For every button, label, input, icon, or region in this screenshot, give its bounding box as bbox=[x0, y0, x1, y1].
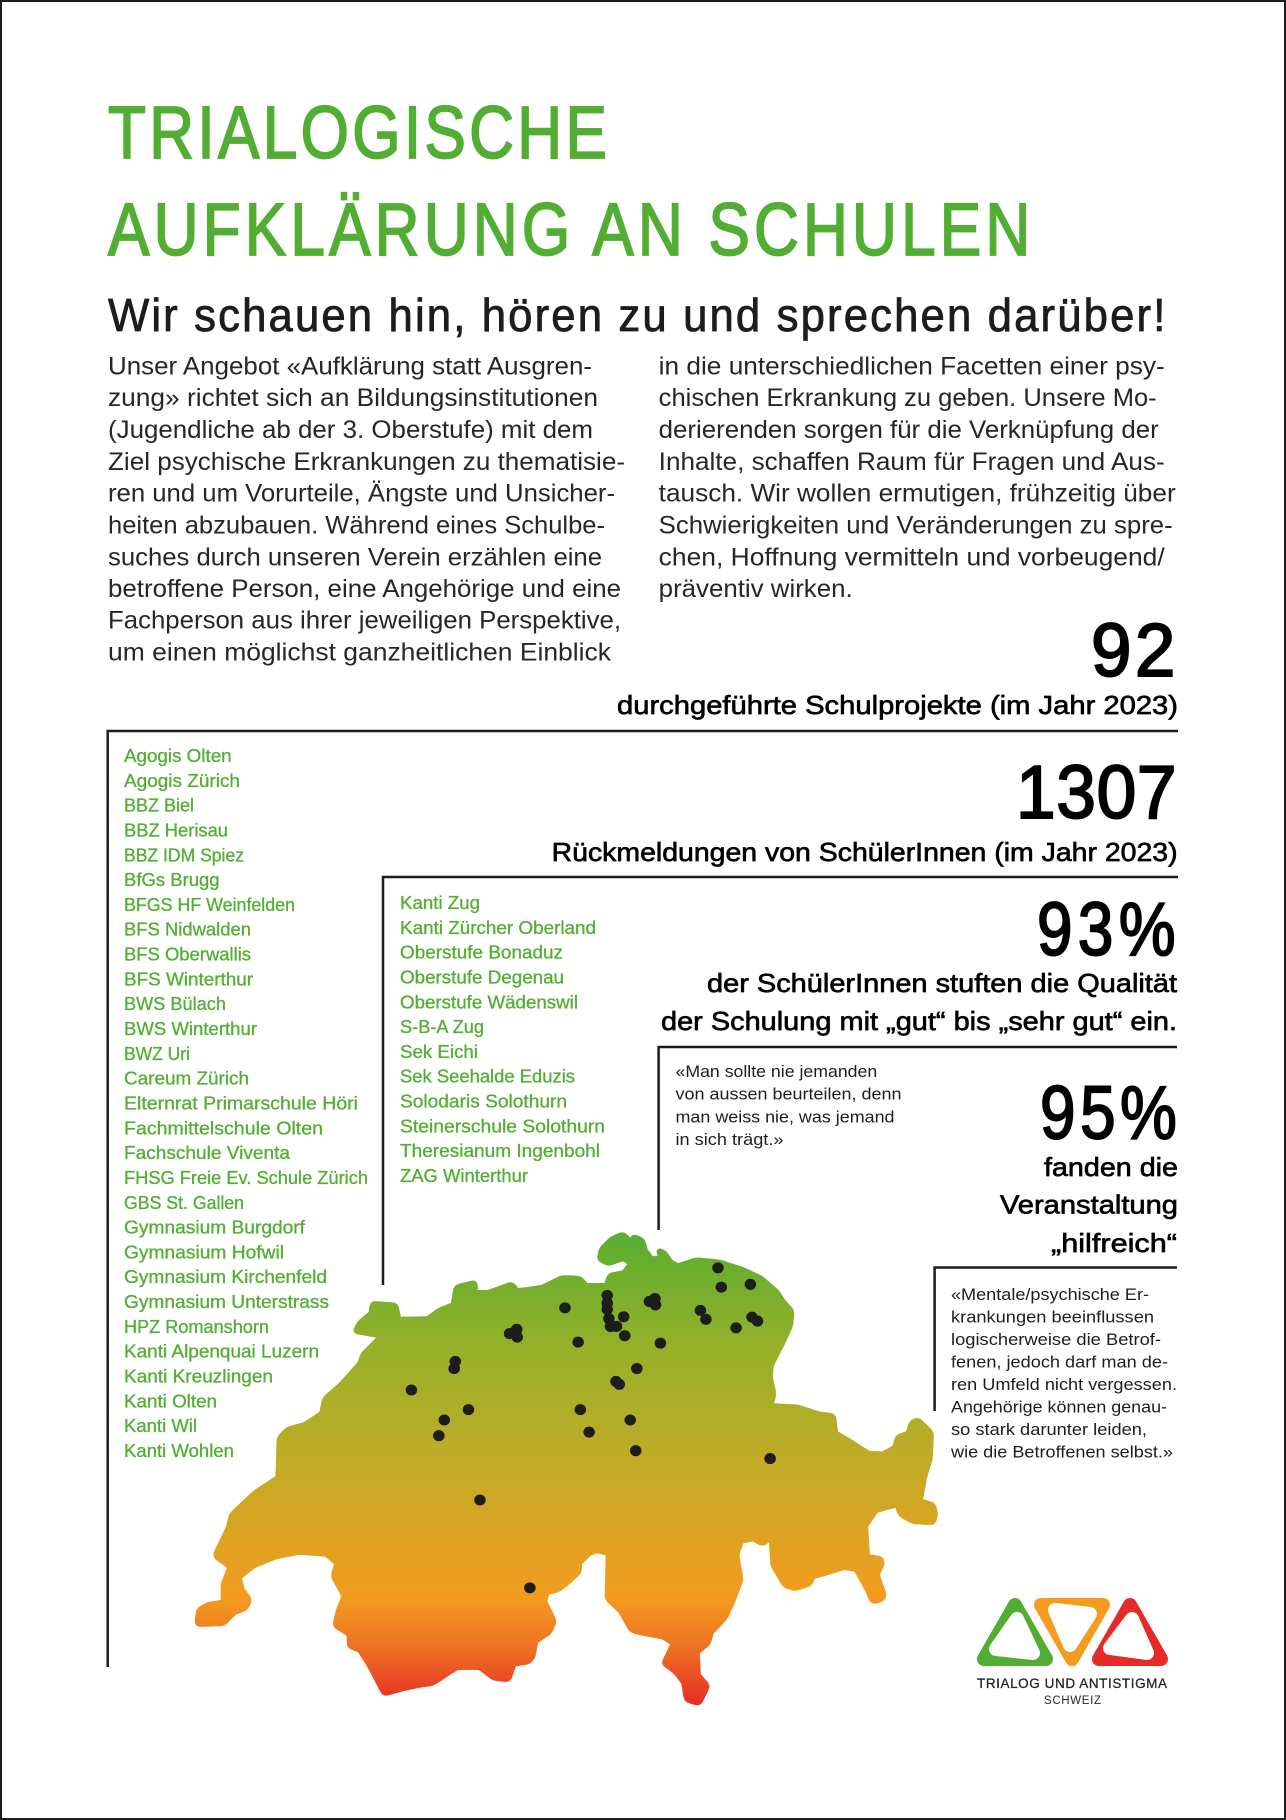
list: schools column 1: Kanti Wohlen bbox=[124, 1441, 234, 1461]
list: schools column 1: Kanti Olten bbox=[124, 1391, 217, 1411]
list: schools column 1: BFGS HF Weinfelden bbox=[124, 895, 295, 915]
list: schools column 2: S-B-A Zug bbox=[400, 1017, 484, 1037]
subtitle: Wir schauen hin, hören zu und sprechen darüber! bbox=[108, 289, 1165, 341]
list: schools column 2: Oberstufe Degenau bbox=[400, 968, 564, 988]
stat: 92 school projects: durchgeführte Schulprojekte (im Jahr 2023) bbox=[617, 690, 1178, 720]
text block: intro column 2: chischen Erkrankung zu geben. Unsere Mo- bbox=[659, 384, 1157, 412]
quote: relatives suffer too: logischerweise die Betrof- bbox=[951, 1331, 1161, 1349]
stat: 95 percent helpful: „hilfreich“ bbox=[1051, 1228, 1177, 1258]
list: schools column 2: Kanti Zürcher Oberland bbox=[400, 918, 596, 938]
list: schools column 2: Oberstufe Wädenswil bbox=[400, 992, 578, 1012]
list: schools column 1: BfGs Brugg bbox=[124, 870, 220, 890]
list: schools column 1: Agogis Zürich bbox=[124, 771, 240, 791]
list: schools column 1: BFS Nidwalden bbox=[124, 920, 251, 940]
text block: intro column 1: zung» richtet sich an Bildungsinstitutionen bbox=[108, 384, 598, 412]
list: schools column 2: Oberstufe Bonaduz bbox=[400, 943, 563, 963]
title bbox=[108, 92, 1030, 271]
stat: 93 percent quality: der SchülerInnen stuften die Qualität bbox=[707, 968, 1178, 998]
list: schools column 1: Fachmittelschule Olten bbox=[124, 1118, 323, 1138]
list: schools column 1: BWS Bülach bbox=[124, 994, 226, 1014]
text block: intro column 2 bbox=[659, 352, 1176, 603]
list: schools column 1: Gymnasium Burgdorf bbox=[124, 1218, 306, 1238]
title: TRIALOGISCHE bbox=[108, 92, 607, 174]
list: schools column 1: HPZ Romanshorn bbox=[124, 1317, 269, 1337]
text block: intro column 2: derierenden sorgen für die Verknüpfung der bbox=[659, 416, 1159, 444]
text block: intro column 1: heiten abzubauen. Während eines Schulbe- bbox=[108, 511, 605, 539]
list: schools column 1: Careum Zürich bbox=[124, 1069, 249, 1089]
logo: Trialog und Antistigma Schweiz: TRIALOG UND ANTISTIGMA bbox=[977, 1676, 1167, 1691]
list: schools column 2: ZAG Winterthur bbox=[400, 1166, 528, 1186]
list: schools column 2: Sek Seehalde Eduzis bbox=[400, 1067, 575, 1087]
quote: judging others bbox=[676, 1063, 902, 1149]
quote: judging others: von aussen beurteilen, denn bbox=[676, 1086, 902, 1104]
quote: relatives suffer too: wie die Betroffenen selbst.» bbox=[950, 1444, 1173, 1462]
text block: intro column 2: chen, Hoffnung vermitteln und vorbeugend/ bbox=[659, 543, 1165, 571]
list: schools column 1: Agogis Olten bbox=[124, 746, 232, 766]
list: schools column 1: BBZ IDM Spiez bbox=[124, 845, 244, 865]
stat: 93 percent quality: 93% bbox=[1037, 887, 1176, 971]
map: Switzerland with school locations bbox=[195, 1232, 937, 1706]
list: schools column 2: Solodaris Solothurn bbox=[400, 1092, 567, 1112]
stat: 92 school projects bbox=[617, 608, 1178, 720]
list: schools column 1: BWZ Uri bbox=[124, 1044, 190, 1064]
quote: relatives suffer too: fenen, jedoch darf man de- bbox=[951, 1353, 1168, 1371]
stat: 95 percent helpful: 95% bbox=[1040, 1071, 1177, 1155]
list: schools column 2 bbox=[400, 893, 605, 1186]
list: schools column 1: Kanti Kreuzlingen bbox=[124, 1366, 273, 1386]
list: schools column 1: Gymnasium Hofwil bbox=[124, 1242, 284, 1262]
icon: green triangle bbox=[984, 1605, 1046, 1659]
icon: red triangle bbox=[1099, 1605, 1161, 1659]
quote: judging others: «Man sollte nie jemanden bbox=[676, 1063, 877, 1081]
text block: intro column 1 bbox=[108, 352, 625, 666]
list: schools column 1: BFS Winterthur bbox=[124, 969, 253, 989]
stat: 95 percent helpful bbox=[1000, 1071, 1178, 1258]
text block: intro column 2: präventiv wirken. bbox=[659, 575, 853, 603]
list: schools column 1: GBS St. Gallen bbox=[124, 1193, 244, 1213]
text block: intro column 1: Ziel psychische Erkrankungen zu thematisie- bbox=[108, 448, 625, 476]
list: schools column 2: Theresianum Ingenbohl bbox=[400, 1141, 600, 1161]
list: schools column 1: BFS Oberwallis bbox=[124, 945, 251, 965]
stat: 95 percent helpful: fanden die bbox=[1044, 1152, 1178, 1182]
quote: judging others: in sich trägt.» bbox=[676, 1131, 784, 1149]
text block: intro column 1: betroffene Person, eine Angehörige und eine bbox=[108, 575, 621, 603]
quote: relatives suffer too: krankungen beeinflussen bbox=[951, 1309, 1154, 1327]
text block: intro column 1: suches durch unseren Verein erzählen eine bbox=[108, 543, 602, 571]
quote: relatives suffer too: ren Umfeld nicht vergessen. bbox=[951, 1376, 1177, 1394]
stat: 93 percent quality: der Schulung mit „gut“ bis „sehr gut“ ein. bbox=[661, 1006, 1177, 1036]
stat: 1307 responses bbox=[552, 751, 1178, 867]
list: schools column 1: FHSG Freie Ev. Schule Zürich bbox=[124, 1168, 368, 1188]
list: schools column 1: Fachschule Viventa bbox=[124, 1143, 291, 1163]
list: schools column 1: BBZ Herisau bbox=[124, 820, 228, 840]
text block: intro column 2: tausch. Wir wollen ermutigen, frühzeitig über bbox=[659, 480, 1176, 508]
quote: judging others: man weiss nie, was jemand bbox=[676, 1108, 894, 1126]
text block: intro column 1: ren und um Vorurteile, Ängste und Unsicher- bbox=[108, 480, 615, 508]
quote: relatives suffer too: so stark darunter leiden, bbox=[951, 1421, 1147, 1439]
stat: 92 school projects: 92 bbox=[1091, 608, 1175, 692]
list: schools column 2: Steinerschule Solothurn bbox=[400, 1116, 605, 1136]
list: schools column 2: Sek Eichi bbox=[400, 1042, 478, 1062]
logo: Trialog und Antistigma Schweiz: SCHWEIZ bbox=[1044, 1695, 1101, 1707]
stat: 93 percent quality bbox=[661, 887, 1178, 1036]
icon: orange triangle bbox=[1041, 1605, 1103, 1659]
list: schools column 1 bbox=[124, 746, 368, 1461]
list: schools column 1: Gymnasium Kirchenfeld bbox=[124, 1267, 327, 1287]
text block: intro column 1: um einen möglichst ganzheitlichen Einblick bbox=[108, 638, 612, 666]
text block: intro column 2: in die unterschiedlichen Facetten einer psy- bbox=[659, 352, 1165, 380]
list: schools column 1: Elternrat Primarschule Höri bbox=[124, 1094, 358, 1114]
stat: 95 percent helpful: Veranstaltung bbox=[1000, 1190, 1178, 1220]
quote: relatives suffer too: «Mentale/psychische Er- bbox=[951, 1286, 1149, 1304]
stat: 1307 responses: 1307 bbox=[1016, 751, 1177, 834]
list: schools column 1: Kanti Wil bbox=[124, 1416, 197, 1436]
list: schools column 1: Gymnasium Unterstrass bbox=[124, 1292, 329, 1312]
quote: relatives suffer too bbox=[950, 1286, 1177, 1462]
text block: intro column 1: Fachperson aus ihrer jeweiligen Perspektive, bbox=[108, 607, 621, 635]
title: AUFKLÄRUNG AN SCHULEN bbox=[108, 189, 1030, 271]
text block: intro column 1: (Jugendliche ab der 3. Oberstufe) mit dem bbox=[108, 416, 593, 444]
text block: intro column 2: Schwierigkeiten und Veränderungen zu spre- bbox=[659, 511, 1173, 539]
list: schools column 1: BBZ Biel bbox=[124, 796, 194, 816]
quote: relatives suffer too: Angehörige können genau- bbox=[951, 1398, 1167, 1416]
list: schools column 1: Kanti Alpenquai Luzern bbox=[124, 1342, 319, 1362]
text block: intro column 1: Unser Angebot «Aufklärung statt Ausgren- bbox=[108, 352, 592, 380]
stat: 1307 responses: Rückmeldungen von SchülerInnen (im Jahr 2023) bbox=[552, 837, 1178, 867]
text block: intro column 2: Inhalte, schaffen Raum für Fragen und Aus- bbox=[659, 448, 1165, 476]
list: schools column 2: Kanti Zug bbox=[400, 893, 480, 913]
logo: Trialog und Antistigma Schweiz bbox=[977, 1605, 1167, 1707]
list: schools column 1: BWS Winterthur bbox=[124, 1019, 257, 1039]
